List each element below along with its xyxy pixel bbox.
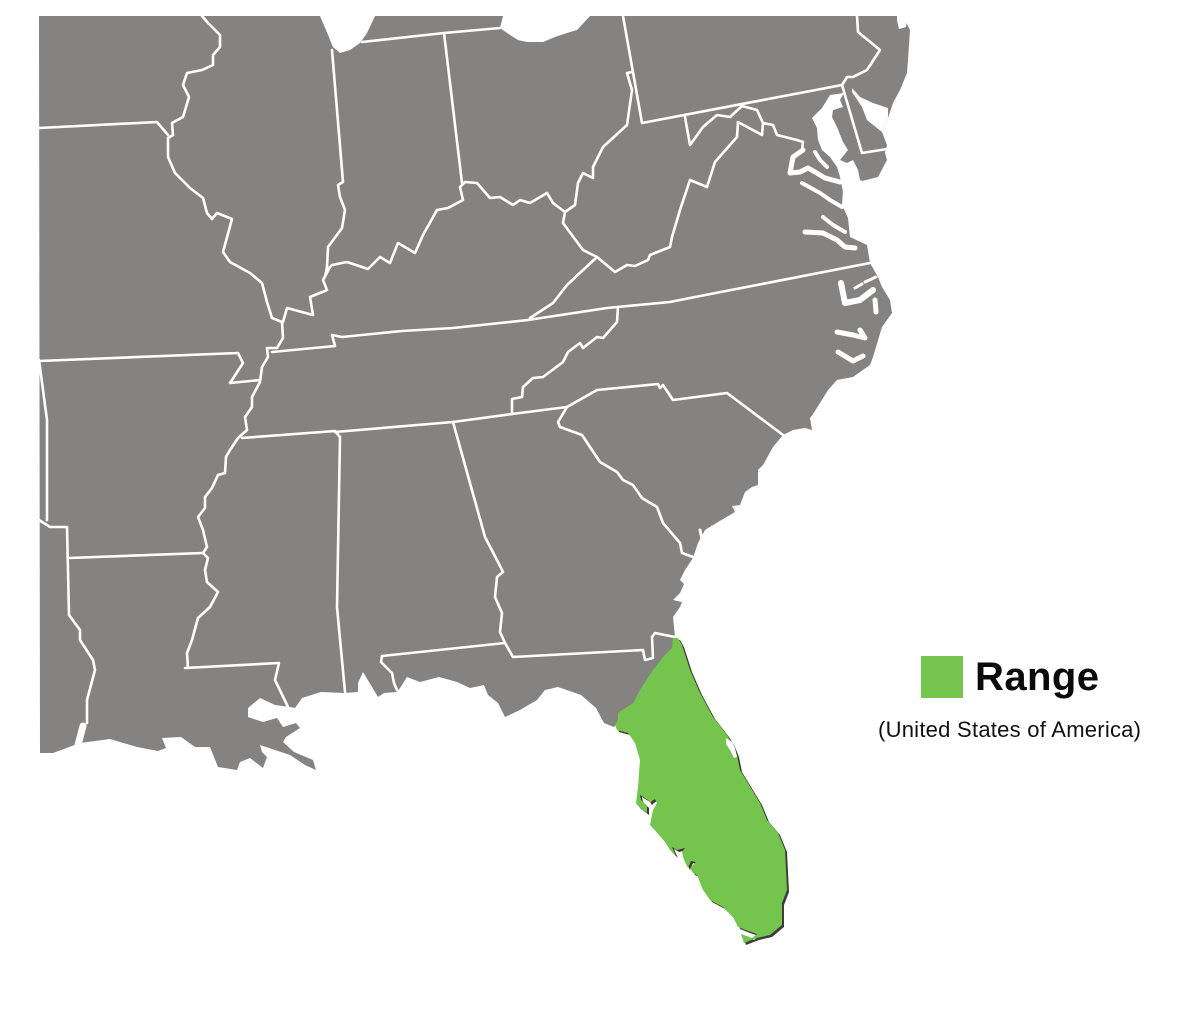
bays and river inlets xyxy=(78,19,907,745)
legend xyxy=(878,655,1141,742)
legend swatch xyxy=(921,656,963,698)
range area: Florida peninsula xyxy=(615,638,787,943)
land mass xyxy=(39,16,910,770)
map: southeastern United States xyxy=(39,16,910,943)
lagoon on the east coast xyxy=(726,738,737,758)
legend sublabel: (United States of America) xyxy=(878,717,1141,742)
legend label: Range xyxy=(975,655,1099,699)
state borders xyxy=(39,16,887,723)
